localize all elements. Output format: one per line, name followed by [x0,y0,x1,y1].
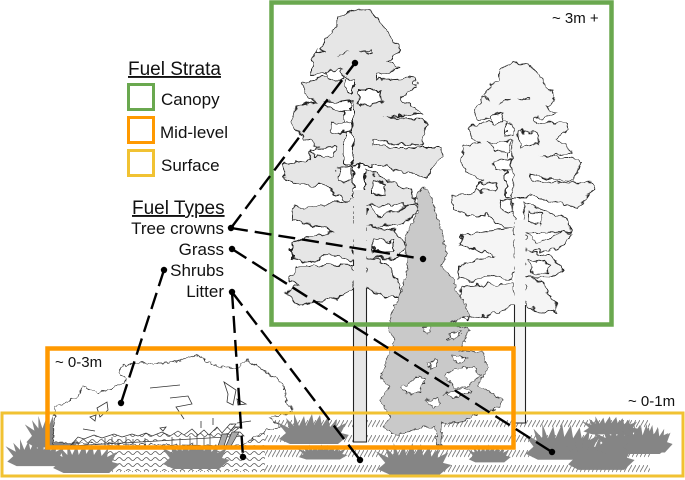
leader dots [118,60,555,463]
surface hatching and litter ground [105,419,650,473]
tree 1 trunk [354,190,366,442]
shrub outline [53,355,293,446]
label: grass: Grass [179,240,224,259]
legend label: surface: Surface [161,156,220,175]
legend heading: Fuel Strata [128,59,221,80]
tree 2 trunk [514,220,526,423]
tree 1 crown [283,10,443,305]
tree 2: right pine [451,63,593,423]
shrub base stems and litter [70,424,244,446]
grass clumps [6,414,673,474]
tree 2 crown [451,63,593,319]
stratum box: canopy [272,2,612,324]
label: tree crowns: Tree crowns [131,219,224,238]
legend swatch: canopy [128,84,154,110]
tree 3: small grey conifer [380,187,503,445]
stratum box: surface [2,413,683,476]
height label: mid-level: ~ 0-3m [55,354,102,371]
tree 1: tall pine [283,10,443,442]
fuel types heading: Fuel Types [132,198,225,219]
label: shrubs: Shrubs [170,261,224,280]
tree 3 gaps [402,326,480,408]
legend swatch: surface [128,150,154,176]
legend swatch: mid-level [128,118,154,142]
shrub [53,355,293,446]
shrub inner detail [83,382,251,431]
height label: canopy: ~ 3m + [552,10,599,27]
legend: fuel types [131,198,225,301]
legend: fuel strata [128,59,228,176]
height label: surface: ~ 0-1m [628,393,675,410]
label: litter: Litter [186,282,224,301]
legend label: mid-level: Mid-level [160,123,228,142]
leader lines [121,63,552,460]
tree 1 trunk edges [354,226,366,442]
tree 2 trunk edges [514,305,526,423]
legend label: canopy: Canopy [161,90,220,109]
stratum box: mid-level [48,348,514,448]
